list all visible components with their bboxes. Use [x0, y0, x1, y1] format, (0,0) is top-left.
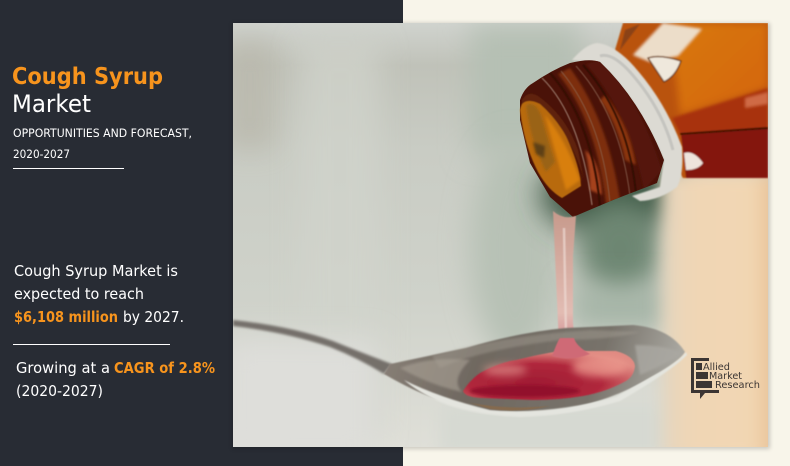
CAGR text: CAGR of 2.8% — [114, 359, 215, 377]
market size text: $6,108 million — [14, 308, 118, 326]
bottle mouth — [520, 94, 584, 198]
subtitle: OPPORTUNITIES AND FORECAST, — [13, 126, 192, 140]
photo: syrup pouring from bottle onto spoon — [225, 23, 782, 462]
title: Market — [12, 90, 91, 118]
logo: Allied Market Research — [691, 358, 760, 399]
market size text: expected to reach — [14, 285, 144, 303]
CAGR text — [16, 359, 215, 400]
bottle body — [612, 23, 768, 178]
blurred beige bottle — [662, 172, 782, 462]
market size text: by 2027. — [123, 308, 184, 326]
logo: Allied Market Research: Allied — [703, 362, 730, 373]
photo shadow — [232, 23, 770, 449]
spoon — [233, 320, 687, 417]
spoon bowl — [384, 325, 685, 415]
bottle neck with thread ridges — [520, 60, 664, 217]
left dark panel — [0, 0, 403, 466]
spoon handle — [233, 320, 392, 374]
syrup stream — [552, 211, 576, 330]
CAGR text: (2020-2027) — [16, 382, 103, 400]
title — [12, 62, 163, 118]
CAGR text: Growing at a — [16, 359, 110, 377]
logo: Allied Market Research: Research — [715, 380, 760, 391]
market size text: Cough Syrup Market is — [14, 262, 178, 280]
subtitle: 2020-2027 — [13, 147, 70, 161]
subtitle — [13, 126, 192, 161]
blurred background tones — [225, 25, 680, 460]
logo: Allied Market Research: Market — [709, 371, 742, 382]
bottle collar — [572, 43, 682, 201]
title: Cough Syrup — [12, 62, 163, 90]
red syrup pool — [463, 338, 635, 400]
market size text — [14, 262, 184, 326]
